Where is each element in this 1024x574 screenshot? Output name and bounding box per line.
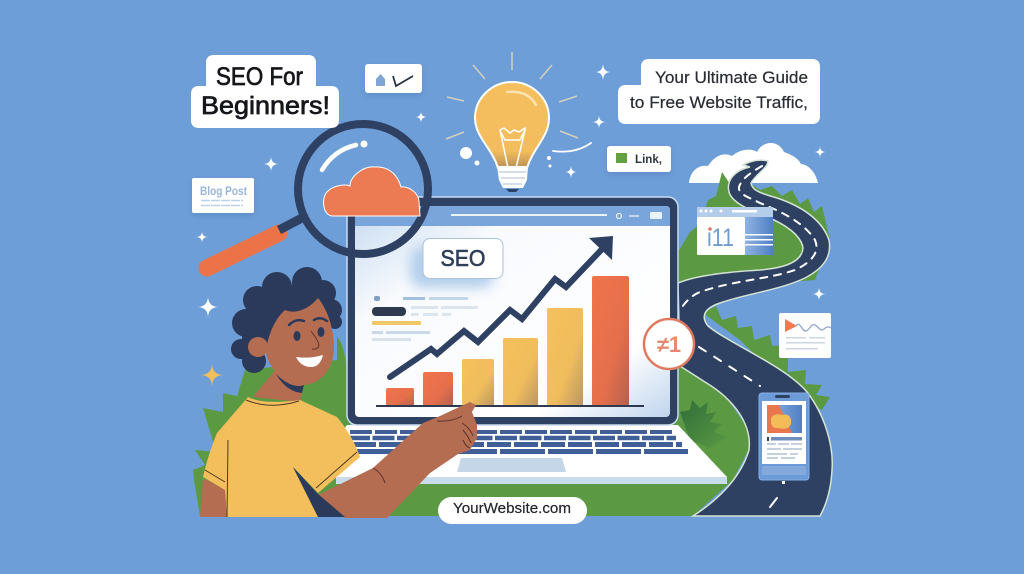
light bulb [446,52,591,192]
cloud behind road [689,143,818,183]
face [266,298,334,385]
hair [231,267,342,373]
SEO label: SEO [440,245,486,271]
chart card [779,313,831,358]
bulb base [497,166,528,188]
bulb rays [446,52,578,139]
growth arrow [390,236,613,377]
subtitle card: to Free Website Traffic, [630,94,808,112]
laptop base [336,425,727,484]
website pill [438,497,587,524]
road dashes [680,166,816,507]
blog post card [192,178,254,213]
title: SEO For Beginners [191,55,339,128]
dark spikes by laptop [680,400,728,448]
screen content [355,206,670,417]
shirt shadow triangle [293,467,345,517]
calendar card: i11 [707,224,734,252]
phone image [767,405,802,433]
green bush behind person [193,337,350,516]
SEO label [423,238,503,278]
ranking badge: ≠1 [657,332,681,357]
lens glare [322,145,356,170]
decorative dots and swoosh [460,143,591,168]
ear [248,337,268,357]
neck shadow [276,374,304,393]
trackpad [457,458,566,472]
link card: Link, [635,154,662,166]
keyboard [348,432,688,452]
winding road [678,160,832,516]
bulb highlight [507,92,536,105]
subtitle card: Your Ultimate Guide [655,69,808,87]
SEO label shadow [410,246,494,288]
calendar card [697,207,773,255]
orange cloud [324,167,420,216]
ranking badge [644,319,694,369]
page text placeholder lines [372,296,478,341]
title: SEO For Beginners: Beginners! [201,92,330,120]
bulb filament [500,128,525,168]
title: SEO For Beginners: SEO For [216,63,303,91]
hand detail lines [373,416,473,483]
small home and check card [365,64,422,93]
neck [253,368,304,402]
bar chart [376,276,644,407]
smile [296,355,323,367]
eyes and brows [289,318,327,349]
green hill upper [678,172,830,290]
left arm [200,478,227,517]
sparkles [196,63,826,387]
laptop [336,197,727,484]
link card [607,146,671,172]
blog post card: Blog Post [200,186,247,198]
yellow shirt [203,397,360,517]
right arm with hand [318,402,477,518]
bulb glass [475,82,549,168]
lens ring [298,124,428,254]
handle neck [279,218,302,230]
phone card [759,393,809,484]
handle [207,233,279,268]
green spikes by road [703,306,830,410]
magnifying glass [207,124,428,268]
green hill lower with ground [345,362,750,516]
laptop screen frame [347,197,678,425]
shirt seams [205,400,357,517]
subtitle card [618,59,820,124]
person [200,267,477,518]
browser bar [355,206,670,226]
website pill: YourWebsite.com [453,501,571,517]
